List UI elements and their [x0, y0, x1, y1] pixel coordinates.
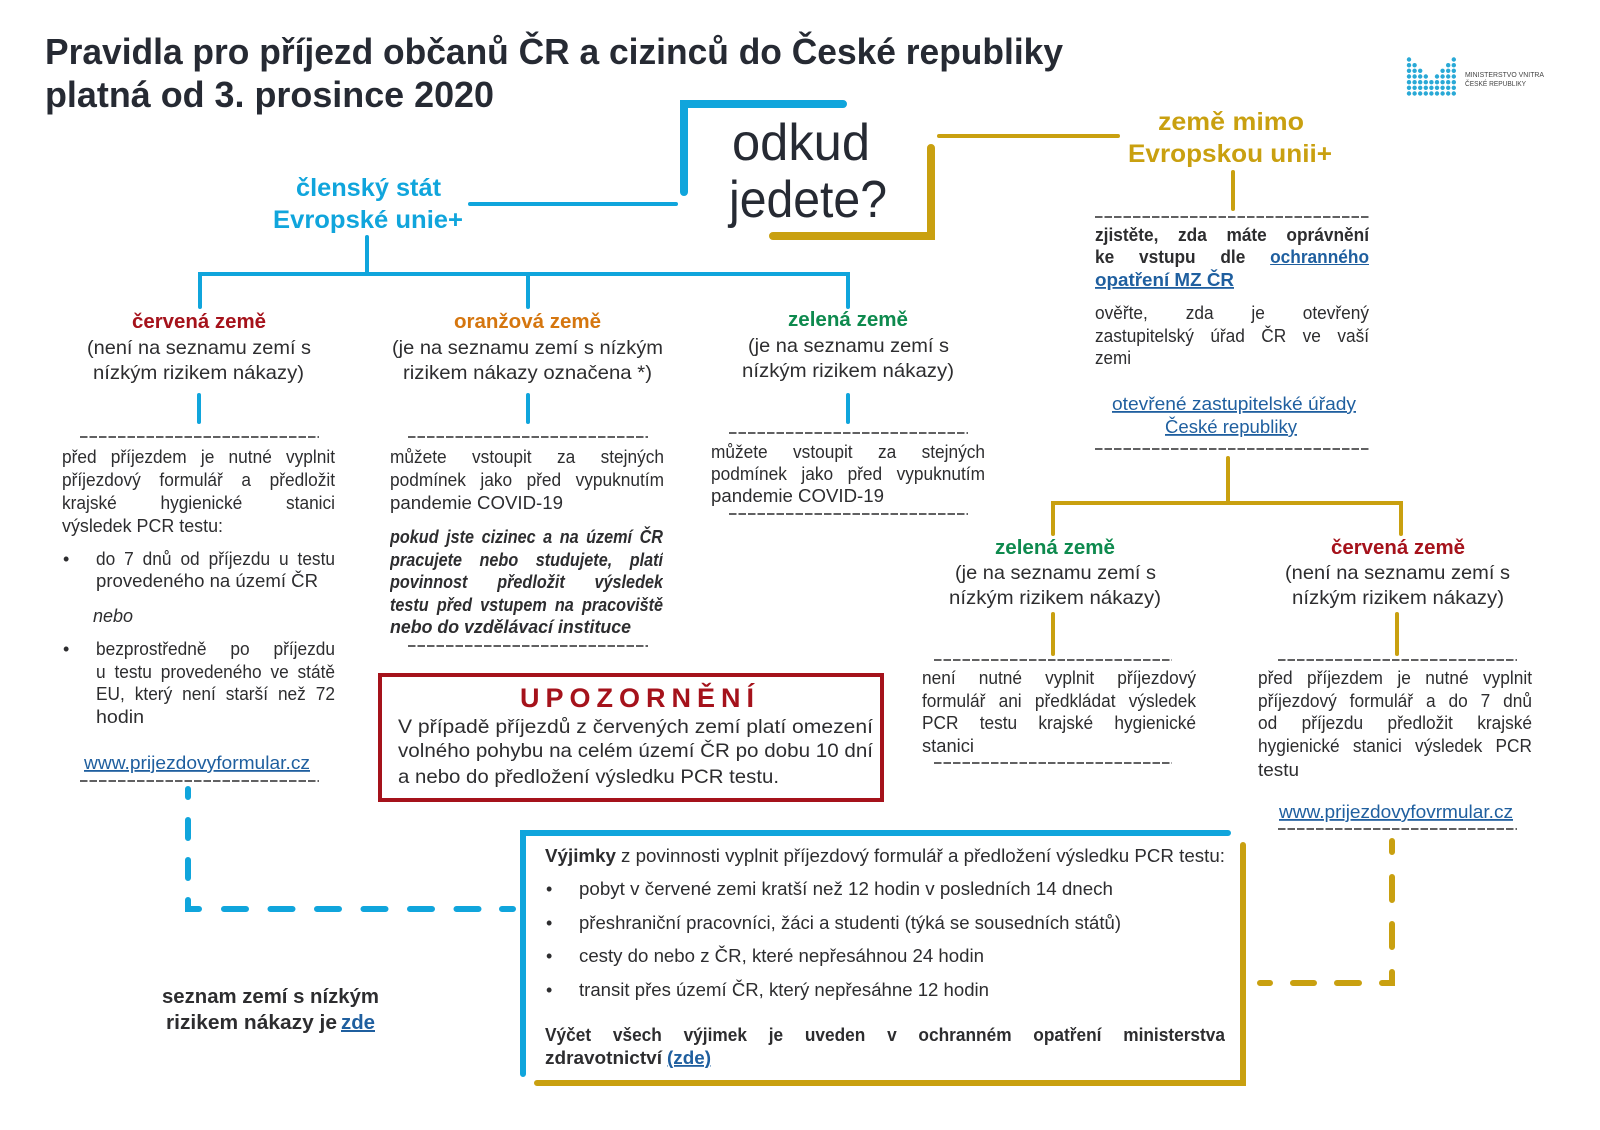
arrow: to non-EU country	[939, 134, 1118, 138]
panel: non-EU entry check: ověřte, zda je otevřený	[1095, 303, 1369, 323]
panel: EU orange country: nebo do vzdělávací instituce	[390, 617, 631, 637]
panel: EU red country	[62, 311, 335, 781]
heading: non-EU country	[1128, 108, 1332, 168]
panel: non-EU entry check: ke vstupu dle ochranného	[1095, 247, 1369, 267]
panel: exceptions: (zde)	[667, 1048, 711, 1068]
non-EU tree connector	[1053, 458, 1401, 534]
panel: EU orange country: pracujete nebo studujete, platí	[390, 550, 663, 570]
panel: EU red country: provedeného na území ČR	[96, 570, 318, 591]
panel: exceptions: přeshraniční pracovníci, žáci a studenti (týká se sousedních států)	[579, 913, 1121, 933]
panel: EU green country: zelená země	[788, 309, 908, 331]
panel: non-EU green country: není nutné vyplnit příjezdový	[922, 668, 1196, 688]
panel: non-EU green country: PCR testu krajské hygienické	[922, 713, 1196, 733]
panel: EU orange country: můžete vstoupit za stejných	[390, 447, 664, 467]
question: odkud jedete?	[727, 114, 887, 229]
panel: exceptions: •	[546, 879, 552, 899]
panel: EU red country: nebo	[93, 606, 133, 626]
panel: non-EU green country	[922, 537, 1196, 763]
question: odkud jedete?: odkud	[732, 114, 870, 172]
panel: non-EU green country: stanici	[922, 736, 974, 756]
heading: red country: červená země	[132, 311, 266, 333]
panel: EU green country: můžete vstoupit za stejných	[711, 442, 985, 462]
logo: Ministerstvo vnitra: MINISTERSTVO VNITRA	[1465, 70, 1544, 79]
panel: EU red country: •	[63, 639, 69, 659]
panel: non-EU red country	[1258, 537, 1532, 829]
callout: warning: a nebo do předložení výsledku PCR testu.	[398, 766, 779, 788]
heading: EU member state: Evropské unie+	[273, 206, 463, 234]
panel: non-EU entry check: otevřené zastupitelské úřady	[1112, 394, 1356, 414]
panel: EU orange country	[390, 311, 664, 646]
panel: EU red country: www.prijezdovyformular.cz	[83, 753, 310, 773]
heading: EU member state	[273, 174, 463, 234]
panel: non-EU green country: nízkým rizikem nákazy)	[949, 587, 1161, 609]
panel: EU green country: (je na seznamu zemí s	[748, 335, 949, 357]
dashed arrow: red EU to exceptions	[188, 789, 513, 909]
callout: warning	[380, 675, 882, 800]
panel: exceptions: Výčet všech výjimek je uveden v ochranném opatření ministerstva	[545, 1025, 1225, 1045]
panel: non-EU red country: před příjezdem je nutné vyplnit	[1258, 668, 1532, 688]
panel: EU red country: nízkým rizikem nákazy)	[93, 362, 304, 384]
title: Pravidla pro příjezd občanů ČR a cizinců do České republiky	[45, 30, 1063, 72]
panel: EU green country: nízkým rizikem nákazy)	[742, 360, 954, 382]
panel: EU orange country: rizikem nákazy označena *)	[403, 362, 652, 384]
panel: non-EU entry check: zjistěte, zda máte oprávnění	[1095, 225, 1369, 245]
question: odkud jedete?: jedete?	[727, 171, 887, 229]
panel: non-EU entry check: zemi	[1095, 348, 1131, 368]
panel: non-EU entry check: opatření MZ ČR	[1095, 269, 1234, 290]
panel: EU red country: do 7 dnů od příjezdu u testu	[96, 549, 335, 569]
gold bracket connector	[773, 148, 931, 236]
panel: EU red country: u testu provedeného ve státě	[96, 662, 335, 682]
panel: EU orange country: (je na seznamu zemí s nízkým	[392, 337, 663, 359]
note: low-risk list link: rizikem nákazy je	[166, 1012, 337, 1034]
panel: non-EU red country: testu	[1258, 760, 1299, 780]
panel: non-EU red country: hygienické stanici výsledek PCR	[1258, 736, 1532, 756]
panel: EU red country: před příjezdem je nutné vyplnit	[62, 447, 335, 467]
panel: EU red country: EU, který není starší než 72	[96, 684, 335, 704]
panel: non-EU green country: zelená země	[995, 537, 1115, 559]
panel: EU orange country: pandemie COVID-19	[390, 493, 563, 513]
panel: non-EU green country: (je na seznamu zemí s	[955, 562, 1156, 584]
callout: warning: volného pohybu na celém území ČR po dobu 10 dní	[398, 739, 874, 762]
panel: non-EU entry check: České republiky	[1165, 416, 1297, 437]
panel: non-EU red country: červená země	[1331, 537, 1465, 559]
blue bracket connector	[684, 104, 843, 192]
note: low-risk list link: seznam zemí s nízkým	[162, 986, 379, 1008]
panel: EU red country: příjezdový formulář a předložit	[62, 470, 335, 490]
callout: warning: V případě příjezdů z červených zemí platí omezení	[398, 716, 874, 738]
panel: EU green country: pandemie COVID-19	[711, 486, 884, 506]
panel: EU orange country: pokud jste cizinec a na území ČR	[390, 527, 663, 547]
panel: exceptions: transit přes území ČR, který nepřesáhne 12 hodin	[579, 979, 989, 1000]
panel: exceptions: •	[546, 913, 552, 933]
panel: EU red country: výsledek PCR testu:	[62, 516, 223, 536]
panel: non-EU entry check	[1095, 172, 1369, 449]
panel: non-EU red country: (není na seznamu zemí s	[1285, 562, 1510, 584]
note: low-risk list link: zde	[341, 1012, 375, 1034]
heading: non-EU country: země mimo	[1158, 108, 1304, 136]
panel: non-EU green country: formulář ani předkládat výsledek	[922, 690, 1196, 710]
panel: EU red country: krajské hygienické stanici	[62, 493, 335, 513]
heading: non-EU country: Evropskou unii+	[1128, 140, 1332, 168]
panel: EU red country: •	[63, 549, 69, 569]
panel: exceptions: •	[546, 946, 552, 966]
panel: EU red country: hodin	[96, 707, 144, 727]
panel: EU orange country: podmínek jako před vypuknutím	[390, 470, 664, 490]
panel: non-EU entry check: zastupitelský úřad ČR ve vaší	[1095, 326, 1369, 346]
title: platná od 3. prosince 2020	[45, 74, 494, 115]
panel: exceptions: z povinnosti vyplnit příjezdový formulář a předložení výsledku PCR testu:	[621, 846, 1225, 866]
callout: warning: UPOZORNĚNÍ	[520, 682, 755, 713]
panel: exceptions: Výjimky	[545, 846, 616, 866]
panel: EU orange country: testu před vstupem na pracoviště	[390, 594, 663, 614]
panel: exceptions: pobyt v červené zemi kratší než 12 hodin v posledních 14 dnech	[579, 879, 1113, 899]
panel: exceptions: zdravotnictví	[545, 1048, 663, 1068]
panel: EU green country	[711, 309, 985, 514]
logo: Ministerstvo vnitra	[1407, 57, 1544, 96]
panel: non-EU red country: www.prijezdovyfovrmular.cz	[1278, 802, 1513, 822]
panel: exceptions	[523, 833, 1243, 1083]
heading: EU member state: členský stát	[296, 174, 442, 202]
panel: EU red country: bezprostředně po příjezdu	[96, 639, 335, 659]
logo: Ministerstvo vnitra: ČESKÉ REPUBLIKY	[1465, 79, 1526, 88]
panel: EU orange country: povinnost předložit výsledek	[390, 572, 663, 592]
panel: non-EU red country: nízkým rizikem nákazy)	[1292, 587, 1504, 609]
dashed arrow: red non-EU to exceptions	[1260, 841, 1392, 983]
panel: EU red country: (není na seznamu zemí s	[87, 337, 311, 359]
EU tree connector	[200, 237, 848, 307]
panel: exceptions: •	[546, 980, 552, 1000]
panel: EU orange country: oranžová země	[454, 311, 601, 333]
panel: EU green country: podmínek jako před vypuknutím	[711, 464, 985, 484]
note: low-risk list link	[162, 986, 379, 1034]
arrow: to EU member state	[470, 202, 676, 206]
panel: non-EU red country: od příjezdu předložit krajské	[1258, 713, 1532, 733]
panel: non-EU red country: příjezdový formulář a do 7 dnů	[1258, 690, 1532, 710]
panel: exceptions: cesty do nebo z ČR, které nepřesáhnou 24 hodin	[579, 945, 984, 966]
title	[45, 30, 1063, 115]
